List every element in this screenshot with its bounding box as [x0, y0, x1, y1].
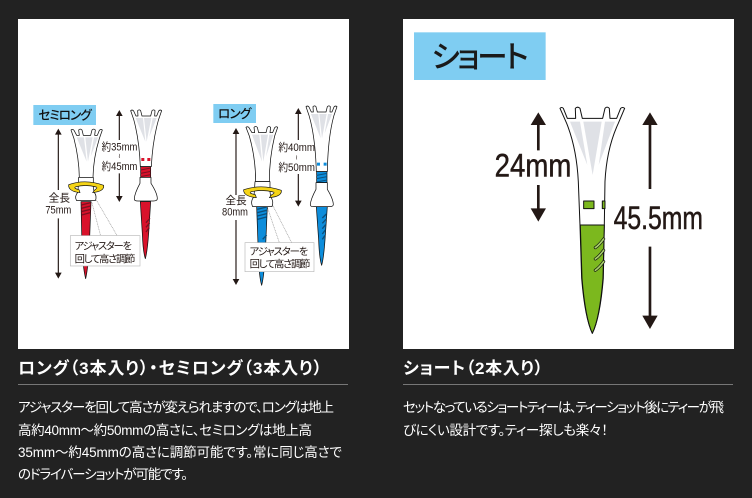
- callout: turn the adjuster: 回して高さ調節: [75, 252, 135, 265]
- text block: long and semi-long description: のドライバーショットが可能です。: [18, 467, 188, 482]
- text block: long and semi-long description: アジャスターを回して高さが変えられますので、ロングは地上: [18, 399, 334, 415]
- callout: turn the adjuster: [245, 243, 314, 272]
- height arrow: total 75mm: [45, 129, 71, 279]
- tee: long assembled: [244, 126, 281, 285]
- height arrow: total 75mm: 全長: [49, 192, 70, 205]
- heading: long and semi-long: ロング（3本入り）・セミロング（3本入り）: [18, 358, 322, 378]
- height arrow: 40 to 50mm: 約50mm: [278, 160, 315, 174]
- tee: semi-long extended: [131, 110, 162, 259]
- label: semi-long: セミロング: [38, 107, 93, 122]
- divider right: [403, 384, 733, 385]
- text block: short description: びにくい設計です。ティー探しも楽々！: [403, 423, 608, 438]
- height arrow: 35 to 45mm: ≀: [118, 153, 121, 160]
- text block: short description: セットなっているショートティーは、ティーショット後にティーが飛: [403, 400, 724, 415]
- label: short: [414, 32, 546, 80]
- height arrow: 40 to 50mm: ≀: [295, 154, 298, 161]
- height arrow: 35 to 45mm: [102, 110, 137, 202]
- callout leader lines: [266, 200, 292, 243]
- text block: short description: [403, 400, 724, 438]
- tee: semi-long assembled: [69, 129, 104, 279]
- height arrow: total 75mm: 75mm: [45, 204, 71, 216]
- height arrow: 40 to 50mm: [278, 108, 315, 207]
- tee: long extended: [306, 106, 337, 265]
- height arrow: 35 to 45mm: 約45mm: [102, 159, 137, 173]
- label: short: ショート: [431, 41, 529, 75]
- text block: long and semi-long description: 高約40mm～約50mmの高さに、セミロングは地上高: [18, 422, 312, 438]
- callout: turn the adjuster: [70, 236, 140, 266]
- text block: long and semi-long description: [18, 399, 342, 482]
- height arrow: total 80mm: 80mm: [222, 207, 248, 219]
- callout leader lines: [92, 198, 117, 236]
- tee: short green: [560, 107, 625, 333]
- height arrow: total 80mm: [222, 128, 248, 285]
- label: long: [213, 104, 256, 123]
- label: long: ロング: [218, 106, 253, 121]
- semi-long diagram: [33, 105, 162, 279]
- callout: turn the adjuster: アジャスターを: [250, 246, 309, 258]
- dimension: 24mm: 24mm: [495, 148, 571, 184]
- height arrow: 40 to 50mm: 約40mm: [278, 140, 315, 154]
- height arrow: 35 to 45mm: 約35mm: [102, 139, 137, 153]
- divider left: [18, 384, 348, 385]
- height arrow: total 80mm: 全長: [225, 194, 247, 207]
- long diagram: [213, 104, 337, 285]
- callout: turn the adjuster: 回して高さ調節: [250, 258, 310, 271]
- heading: short: ショート（2本入り）: [403, 359, 543, 378]
- dimension: 45.5mm: 45.5mm: [614, 200, 703, 236]
- panel: long and semi-long tees: [18, 19, 349, 349]
- dimension: 24mm: [495, 112, 571, 222]
- dimension: 45.5mm: [614, 112, 703, 329]
- label: semi-long: [33, 105, 96, 125]
- callout: turn the adjuster: アジャスターを: [75, 240, 132, 252]
- panel: short tee: [403, 19, 734, 349]
- text block: long and semi-long description: 35mm～約45mmの高さに調節可能です。常に同じ高さで: [18, 444, 342, 460]
